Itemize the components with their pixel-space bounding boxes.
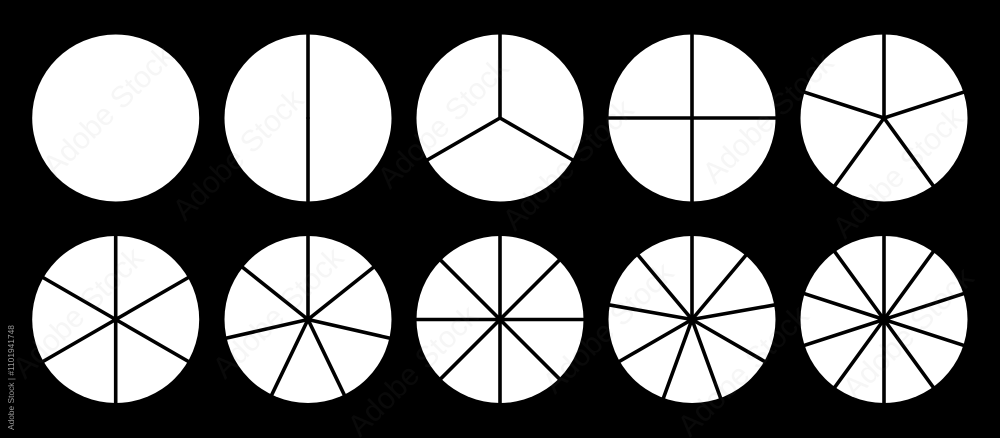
watermarks: Adobe Stock	[837, 261, 981, 405]
watermarks: Adobe Stock	[537, 256, 681, 400]
circle: 3 parts	[416, 32, 584, 202]
circle: 5 parts	[800, 32, 968, 202]
circle: 9 parts	[607, 234, 777, 403]
circle: 1 part	[32, 34, 199, 202]
watermarks: Adobe Stock	[372, 51, 516, 195]
watermarks: Adobe Stock	[7, 241, 151, 385]
circle: 8 parts	[414, 234, 586, 406]
watermarks: Adobe Stock	[697, 46, 841, 190]
watermarks: Adobe Stock	[37, 39, 181, 183]
watermarks: Adobe Stock	[167, 83, 311, 227]
watermarks: Adobe Stock	[497, 93, 641, 237]
circle: 7 parts	[224, 234, 392, 403]
circle: 2 parts	[224, 32, 392, 204]
side credit text: Adobe Stock | #1101941748	[6, 325, 16, 430]
circle: 4 parts	[606, 32, 778, 204]
watermarks: Adobe Stock	[207, 241, 351, 385]
circle: 6 parts	[32, 234, 199, 406]
circle: 10 parts	[800, 234, 968, 406]
watermarks: Adobe Stock	[827, 101, 971, 245]
